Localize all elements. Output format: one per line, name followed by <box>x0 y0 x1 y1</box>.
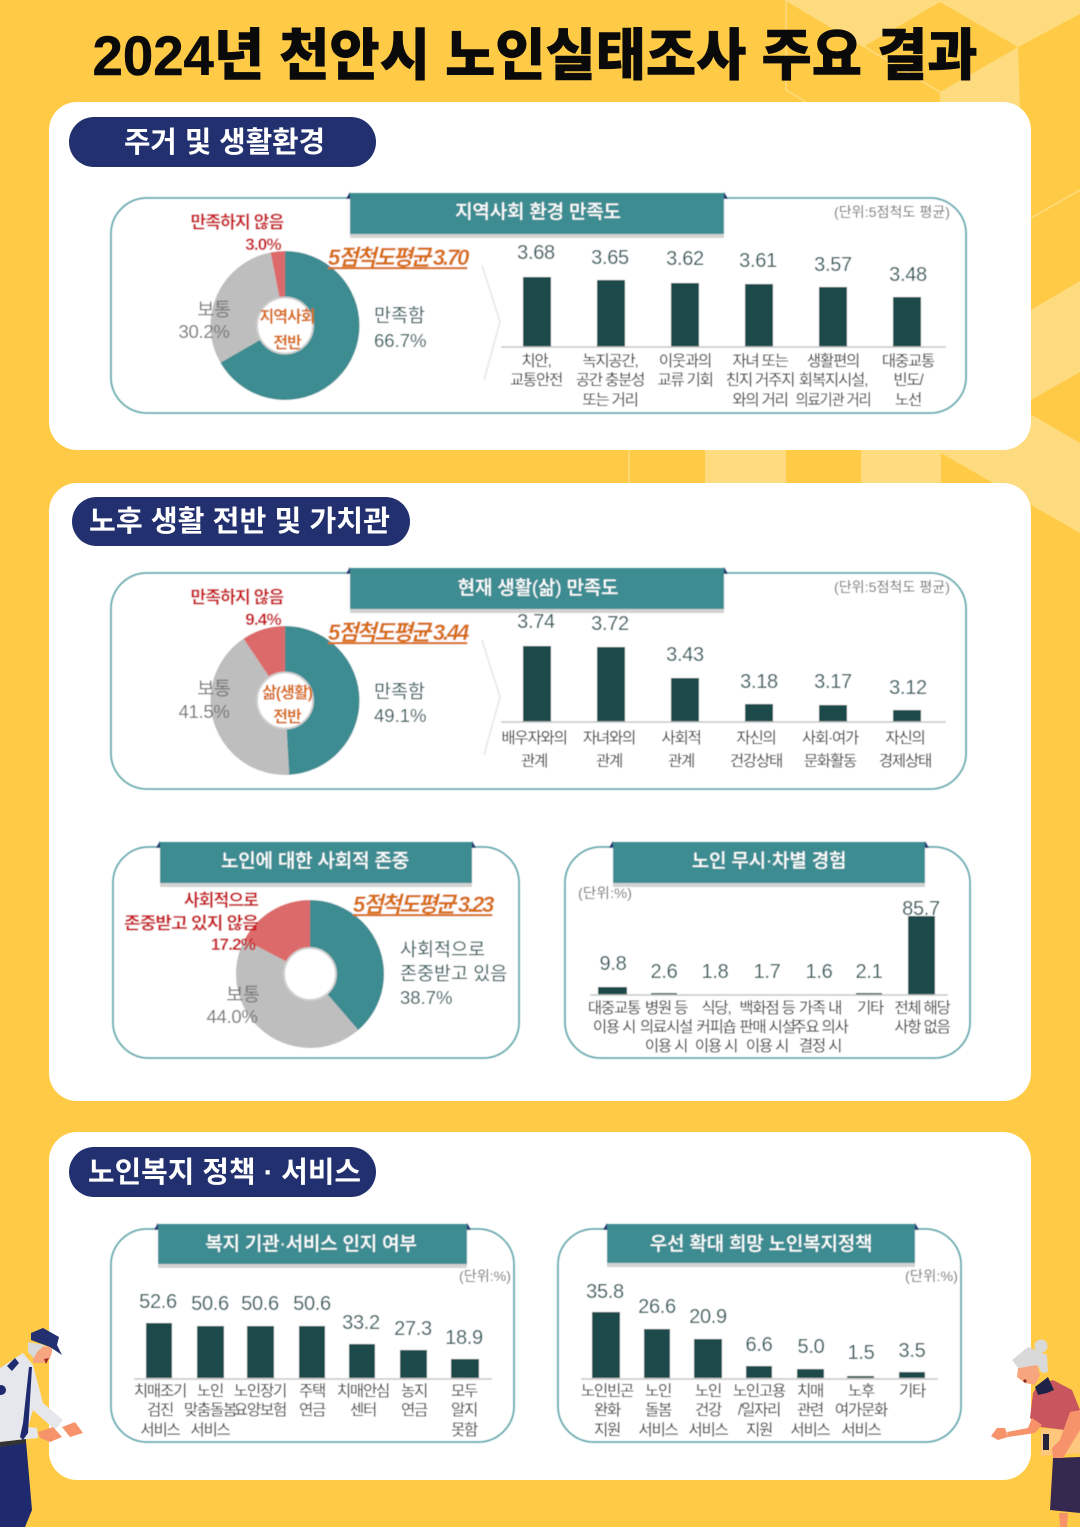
bar chart: community: 또는 거리 <box>582 391 638 409</box>
bar chart: discrimination: 1.6 <box>806 961 833 983</box>
chart frame: desired welfare policies: (단위:%) <box>905 1268 958 1284</box>
donut chart: community <box>179 213 470 376</box>
title: 2024년 천안시 노인실태조사 주요 결과 <box>92 24 978 87</box>
bar chart: awareness: 치매조기 <box>134 1382 186 1400</box>
bar chart: life: 자신의 <box>736 729 776 747</box>
donut chart: respect: 보통 <box>226 984 260 1005</box>
bar chart: discrimination: 이용 시 <box>593 1018 635 1036</box>
chart frame: current life satisfaction <box>111 567 966 789</box>
chart frame: desired welfare policies <box>558 1223 961 1442</box>
chart frame: current life satisfaction: (단위:5점척도 평균) <box>834 579 950 595</box>
bar chart: awareness: 50.6 <box>241 1293 279 1315</box>
donut chart: life: 5점척도평균 3.44 <box>328 620 469 645</box>
bar chart: life: 관계 <box>521 752 547 770</box>
bar chart: awareness: 18.9 <box>445 1327 483 1349</box>
arrow <box>482 265 500 380</box>
bar chart: community: 이웃과의 <box>659 352 711 370</box>
bar chart: awareness: 알지 <box>451 1401 477 1419</box>
bar chart: life: 경제상태 <box>879 752 931 770</box>
bar chart: desired policies: 관련 <box>797 1401 823 1419</box>
bar chart: desired policies: 5.0 <box>798 1336 825 1358</box>
bar chart: community: 교류 기회 <box>657 371 713 389</box>
bar chart: discrimination: 주요 의사 <box>792 1018 849 1036</box>
heading pill: welfare <box>69 1147 376 1197</box>
panel: later life and values <box>49 483 1031 1101</box>
bar chart: awareness: 서비스 <box>190 1421 231 1439</box>
bar chart: life: 자신의 <box>885 729 925 747</box>
heading pill: housing <box>69 117 376 167</box>
bar chart: discrimination: 85.7 <box>902 898 940 920</box>
bar chart: discrimination: 백화점 등 <box>739 999 796 1017</box>
donut chart: community: 보통 <box>197 299 231 320</box>
bar chart: awareness: 노인장기 <box>234 1382 286 1400</box>
bar chart: desired policies: 서비스 <box>638 1421 679 1439</box>
bar chart: life: 건강상태 <box>730 752 782 770</box>
bar chart: discrimination: 기타 <box>857 999 884 1017</box>
bar chart: desired policies: 서비스 <box>688 1421 729 1439</box>
bar chart: desired policies: 35.8 <box>586 1281 624 1303</box>
bar chart: discrimination: 식당, <box>701 999 731 1017</box>
bar chart: awareness: 모두 <box>451 1383 478 1400</box>
donut chart: life: 41.5% <box>179 701 229 722</box>
donut chart: life: 만족함 <box>374 681 425 702</box>
bar chart: awareness: 50.6 <box>191 1293 229 1315</box>
chart frame: awareness of welfare services: 복지 기관·서비스 인지 여부 <box>205 1233 417 1255</box>
donut chart: life: 만족하지 않음 <box>191 588 284 607</box>
bar chart: life: 문화활동 <box>804 752 857 770</box>
donut chart: respect <box>124 891 507 1027</box>
bar chart: life: 3.18 <box>740 671 778 693</box>
bar chart: desired policies: 1.5 <box>848 1342 875 1364</box>
bar chart: desired policies: /일자리 <box>738 1401 780 1419</box>
bar chart: awareness: 치매안심 <box>337 1382 389 1400</box>
bar chart: community: 의료기관 거리 <box>796 391 870 409</box>
bar chart: life: 3.12 <box>889 677 927 699</box>
chart frame: social respect for older adults: 노인에 대한 사회적 존중 <box>221 850 409 872</box>
bar chart: life: 3.43 <box>666 644 704 666</box>
donut chart: respect: 사회적으로 <box>400 939 485 960</box>
bar chart: community: 3.65 <box>591 247 629 269</box>
chart frame: community environment satisfaction: (단위:5점척도 평균) <box>834 204 950 220</box>
chart frame: current life satisfaction: 현재 생활(삶) 만족도 <box>458 577 618 599</box>
donut chart: respect: 존중받고 있지 않음 <box>124 914 258 933</box>
bar chart: desired policies: 건강 <box>695 1401 722 1419</box>
chart frame: discrimination experience: (단위:%) <box>578 885 632 901</box>
bar chart: discrimination: 2.6 <box>651 961 678 983</box>
bar chart: awareness: 센터 <box>350 1401 376 1419</box>
bar chart: discrimination: 가족 내 <box>799 999 841 1017</box>
bar chart: desired policies: 지원 <box>594 1421 620 1439</box>
bar chart: community <box>501 242 946 409</box>
bar chart: community: 3.48 <box>889 264 927 286</box>
donut chart: life: 9.4% <box>245 610 281 629</box>
donut chart: life <box>179 588 469 752</box>
bar chart: discrimination: 이용 시 <box>645 1037 687 1055</box>
bar chart: awareness <box>134 1291 492 1439</box>
bar chart: discrimination: 2.1 <box>856 961 883 983</box>
donut chart: community: 5점척도평균 3.70 <box>328 245 470 270</box>
bar chart: desired policies: 노후 <box>848 1382 875 1400</box>
bar chart: discrimination: 9.8 <box>600 953 627 975</box>
donut chart: community: 전반 <box>273 334 302 352</box>
bar chart: awareness: 33.2 <box>342 1312 380 1334</box>
chart frame: desired welfare policies: 우선 확대 희망 노인복지정책 <box>650 1233 872 1255</box>
arrow <box>482 640 500 755</box>
illustration: elderly police officer <box>0 1328 83 1527</box>
chart frame: discrimination experience: 노인 무시·차별 경험 <box>692 850 846 872</box>
bar chart: community: 교통안전 <box>510 371 562 389</box>
donut chart: life: 49.1% <box>374 705 426 726</box>
panel: housing and living environment <box>49 102 1031 450</box>
bar chart: discrimination: 사항 없음 <box>894 1018 951 1036</box>
donut chart: life: 보통 <box>197 678 231 699</box>
donut chart: respect: 사회적으로 <box>184 891 258 910</box>
bar chart: desired policies: 노인고용 <box>733 1382 786 1400</box>
bar chart: desired policies: 여가문화 <box>835 1401 888 1419</box>
donut chart: respect: 존중받고 있음 <box>400 963 507 984</box>
bar chart: awareness: 50.6 <box>293 1293 331 1315</box>
chart frame: awareness of welfare services: (단위:%) <box>459 1268 511 1284</box>
chart frame: community environment satisfaction: 지역사회 환경 만족도 <box>455 201 621 223</box>
bar chart: awareness: 연금 <box>299 1401 326 1419</box>
bar chart: community: 대중교통 <box>882 352 935 370</box>
bar chart: awareness: 못함 <box>451 1421 478 1439</box>
bar chart: desired policies: 6.6 <box>746 1334 773 1356</box>
bar chart: discrimination: 전체 해당 <box>894 999 951 1017</box>
bar chart: discrimination: 결정 시 <box>799 1037 841 1055</box>
bar chart: discrimination: 의료시설 <box>640 1018 692 1036</box>
bar chart: community: 녹지공간, <box>582 352 638 370</box>
panel: elderly welfare policy and services <box>49 1132 1031 1480</box>
bar chart: desired policies: 20.9 <box>689 1306 727 1328</box>
bar chart: discrimination: 1.7 <box>754 961 781 983</box>
bar chart: life: 사회적 <box>661 729 701 747</box>
bar chart: life: 배우자와의 <box>501 729 567 747</box>
bar chart: community: 치안, <box>521 352 551 370</box>
bar chart: community: 자녀 또는 <box>732 352 789 370</box>
bar chart: awareness: 검진 <box>147 1401 173 1419</box>
donut chart: respect: 44.0% <box>207 1006 257 1027</box>
donut chart: community: 지역사회 <box>260 308 314 326</box>
bar chart: community: 친지 거주지 <box>726 371 794 389</box>
bar chart: awareness: 노인 <box>197 1382 223 1400</box>
bar chart: life <box>501 611 946 770</box>
bar chart: awareness: 농지 <box>401 1382 427 1400</box>
bar chart: community: 회복지시설, <box>799 371 867 389</box>
bar chart: community: 와의 거리 <box>732 391 788 409</box>
bar chart: discrimination <box>588 898 951 1055</box>
illustration: elderly woman with envelope <box>991 1340 1080 1527</box>
bar chart: desired policies: 노인 <box>645 1382 671 1400</box>
bar chart: discrimination: 판매 시설 <box>739 1018 795 1036</box>
bar chart: community: 공간 충분성 <box>576 371 644 389</box>
bar chart: desired policies: 26.6 <box>638 1296 676 1318</box>
bar chart: community: 3.61 <box>739 250 777 272</box>
bar chart: community: 노선 <box>895 391 921 409</box>
bar chart: awareness: 연금 <box>401 1401 428 1419</box>
bar chart: desired policies: 지원 <box>746 1421 772 1439</box>
bar chart: community: 3.68 <box>517 242 555 264</box>
donut chart: respect: 38.7% <box>400 987 452 1008</box>
donut chart: life: 삶(생활) <box>262 684 313 702</box>
bar chart: desired policies: 노인 <box>695 1382 721 1400</box>
bar chart: awareness: 주택 <box>299 1382 325 1400</box>
donut chart: community: 만족함 <box>374 305 425 326</box>
donut chart: community: 66.7% <box>374 330 426 351</box>
donut chart: life: 전반 <box>273 708 302 726</box>
bar chart: community: 빈도/ <box>893 371 925 389</box>
bar chart: discrimination: 커피숍 <box>696 1018 737 1036</box>
donut chart: respect: 5점척도평균 3.23 <box>353 892 494 917</box>
chart frame: awareness of welfare services <box>111 1223 514 1442</box>
heading pill: housing: 주거 및 생활환경 <box>124 126 325 159</box>
bar chart: community: 3.57 <box>814 254 852 276</box>
bar chart: life: 3.17 <box>814 671 852 693</box>
bar chart: desired policies: 돌봄 <box>645 1402 672 1419</box>
bar chart: awareness: 요양보험 <box>234 1401 286 1419</box>
bar chart: life: 관계 <box>596 752 622 770</box>
chart frame: community environment satisfaction <box>111 192 966 413</box>
bar chart: awareness: 27.3 <box>394 1318 432 1340</box>
bar chart: community: 3.62 <box>666 248 704 270</box>
bar chart: desired policies: 기타 <box>899 1382 926 1400</box>
bar chart: discrimination: 이용 시 <box>695 1037 737 1055</box>
bar chart: discrimination: 병원 등 <box>645 999 688 1017</box>
bar chart: awareness: 서비스 <box>140 1421 181 1439</box>
bar chart: desired policies: 노인빈곤 <box>581 1382 634 1400</box>
bar chart: awareness: 맞춤돌봄 <box>184 1401 237 1419</box>
bar chart: discrimination: 이용 시 <box>746 1037 788 1055</box>
heading pill: later life: 노후 생활 전반 및 가치관 <box>89 505 390 538</box>
bar chart: life: 사회·여가 <box>802 729 859 747</box>
bar chart: desired policies: 3.5 <box>899 1340 926 1362</box>
donut chart: community: 3.0% <box>245 235 281 254</box>
donut chart: community: 30.2% <box>179 321 229 342</box>
bar chart: desired policies <box>581 1281 938 1439</box>
donut chart: respect: 17.2% <box>211 935 256 954</box>
donut chart: community: 만족하지 않음 <box>191 213 284 232</box>
chart frame: discrimination experience <box>565 841 970 1058</box>
bar chart: life: 3.72 <box>591 613 629 635</box>
bar chart: discrimination: 1.8 <box>702 961 729 983</box>
bar chart: discrimination: 대중교통 <box>588 999 641 1017</box>
chart frame: social respect for older adults <box>113 841 519 1058</box>
bar chart: desired policies: 서비스 <box>790 1421 831 1439</box>
bar chart: desired policies: 서비스 <box>841 1421 882 1439</box>
bar chart: desired policies: 완화 <box>594 1401 621 1419</box>
bar chart: community: 생활편의 <box>807 352 859 370</box>
bar chart: life: 관계 <box>668 752 694 770</box>
heading pill: welfare: 노인복지 정책 · 서비스 <box>88 1156 361 1189</box>
bar chart: desired policies: 치매 <box>797 1382 823 1400</box>
bar chart: awareness: 52.6 <box>139 1291 177 1313</box>
bar chart: life: 3.74 <box>517 611 555 633</box>
bar chart: life: 자녀와의 <box>583 729 635 747</box>
heading pill: later life <box>72 497 410 546</box>
